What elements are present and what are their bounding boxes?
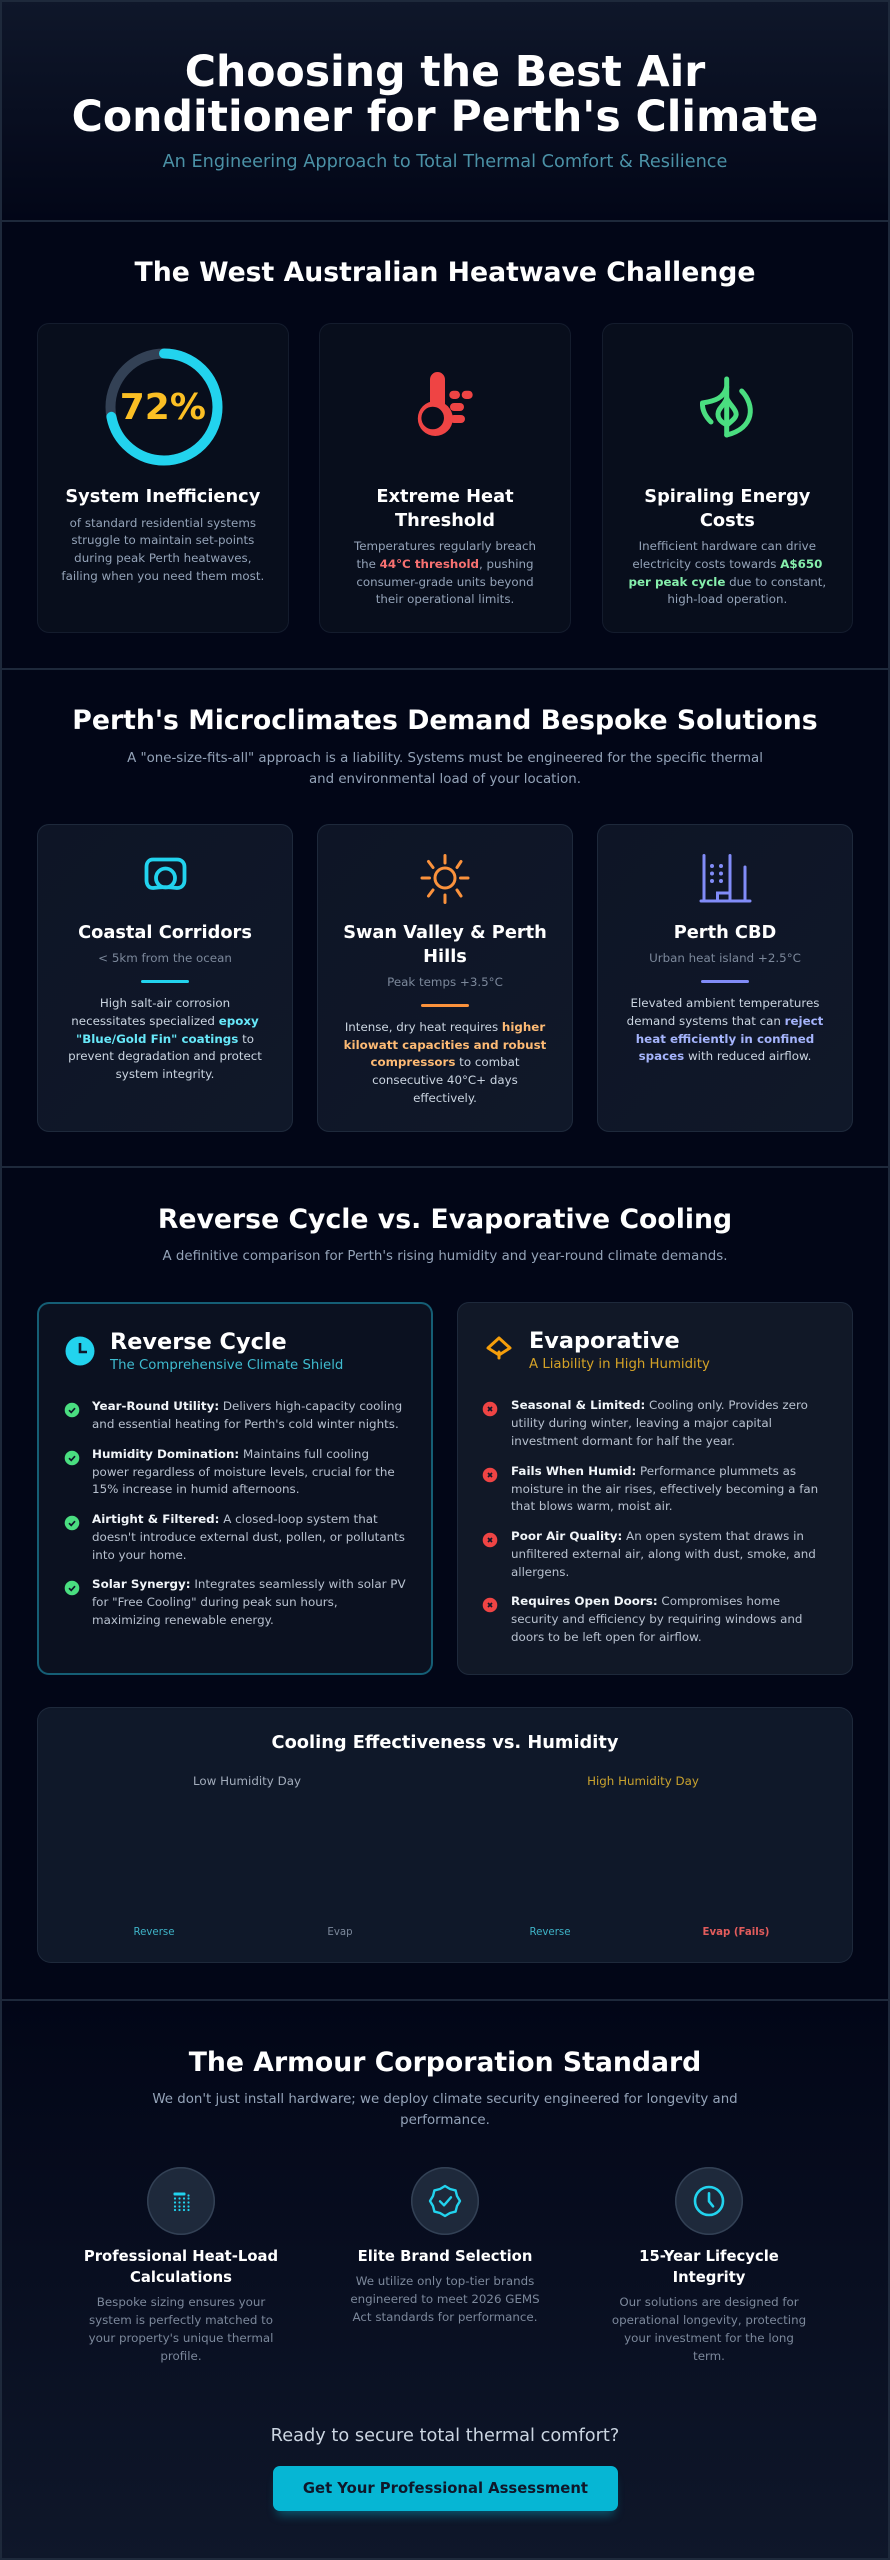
call to action button bbox=[273, 2466, 618, 2511]
list text bbox=[511, 1398, 808, 1448]
chart: 72 percent ring bbox=[106, 348, 222, 466]
panel: system inefficiency bbox=[37, 323, 289, 633]
column: heat-load calculations bbox=[65, 2167, 297, 2367]
icon: warning diamond bbox=[486, 1336, 512, 1360]
card title: Extreme Heat bbox=[376, 486, 514, 507]
intro text: A definitive comparison for Perth's rising humidity and year-round climate demands. bbox=[163, 1249, 727, 1264]
card text: Elevated ambient temperatures bbox=[631, 996, 819, 1010]
icon: check bbox=[64, 1450, 80, 1466]
column text: Act standards for performance. bbox=[353, 2310, 537, 2324]
list text: Poor Air Quality: An open system that draws in bbox=[511, 1529, 804, 1543]
icon: cross bbox=[482, 1532, 498, 1548]
list text: power regardless of moisture levels, crucial for the bbox=[92, 1465, 395, 1479]
stat: 72%: 72% bbox=[120, 387, 206, 428]
list text: Solar Synergy: Integrates seamlessly with solar PV bbox=[92, 1577, 406, 1591]
card text: effectively. bbox=[413, 1091, 477, 1105]
card text: per peak cycle due to constant, bbox=[629, 575, 826, 589]
icon: badge check bbox=[428, 2184, 462, 2218]
column title: Professional Heat-Load bbox=[84, 2248, 278, 2265]
intro text: We don't just install hardware; we deploy climate security engineered for longevity and bbox=[152, 2092, 738, 2107]
panel: spiraling energy costs bbox=[602, 323, 853, 633]
card text bbox=[354, 539, 536, 606]
card text: during peak Perth heatwaves, bbox=[74, 551, 252, 565]
column title: Elite Brand Selection bbox=[358, 2248, 532, 2265]
column title: 15-Year Lifecycle bbox=[639, 2248, 779, 2265]
column text: profile. bbox=[160, 2349, 202, 2363]
column text: Our solutions are designed for bbox=[619, 2295, 799, 2309]
column text: operational longevity, protecting bbox=[612, 2313, 806, 2327]
card text: system integrity. bbox=[116, 1067, 214, 1081]
card title: Coastal Corridors bbox=[78, 922, 252, 943]
location note: Peak temps +3.5°C bbox=[387, 974, 503, 988]
chart title: Cooling Effectiveness vs. Humidity bbox=[272, 1732, 618, 1753]
column text bbox=[65, 2294, 297, 2366]
column: elite brand selection bbox=[329, 2167, 561, 2367]
bar label: Evap bbox=[327, 1927, 353, 1938]
list text: for "Free Cooling" during peak sun hours, bbox=[92, 1595, 338, 1609]
list text: doesn't introduce external dust, pollen, or pollutants bbox=[92, 1530, 405, 1544]
card text: heat efficiently in confined bbox=[636, 1032, 814, 1046]
card text: Inefficient hardware can drive bbox=[639, 539, 816, 553]
list text bbox=[92, 1399, 402, 1431]
list text: Humidity Domination: Maintains full cooling bbox=[92, 1447, 369, 1461]
card text: kilowatt capacities and robust bbox=[344, 1038, 546, 1052]
intro text: A "one-size-fits-all" approach is a liability. Systems must be engineered for the specific thermal bbox=[127, 751, 763, 766]
card text: "Blue/Gold Fin" coatings to bbox=[76, 1032, 254, 1046]
column text: Bespoke sizing ensures your bbox=[97, 2295, 265, 2309]
column text bbox=[329, 2273, 561, 2327]
location note: Urban heat island +2.5°C bbox=[649, 951, 801, 965]
list item bbox=[64, 1447, 395, 1496]
column text: system is perfectly matched to bbox=[89, 2313, 273, 2327]
card text: consecutive 40°C+ days bbox=[372, 1073, 518, 1087]
panel: perth cbd bbox=[597, 824, 853, 1132]
group label: high humidity: High Humidity Day bbox=[587, 1774, 699, 1788]
list item bbox=[482, 1398, 808, 1448]
card text: consumer-grade units beyond bbox=[356, 575, 534, 589]
card text bbox=[627, 996, 823, 1063]
location note: < 5km from the ocean bbox=[98, 951, 232, 965]
icon: cross bbox=[482, 1468, 498, 1482]
heading: The Armour Corporation Standard bbox=[189, 2047, 701, 2078]
icon: check bbox=[64, 1580, 80, 1596]
column title bbox=[593, 2247, 825, 2288]
card title bbox=[376, 486, 514, 531]
list item bbox=[64, 1512, 405, 1562]
card title: Hills bbox=[423, 946, 467, 967]
list text: Year-Round Utility: Delivers high-capacity cooling bbox=[92, 1399, 402, 1413]
card title bbox=[644, 486, 810, 531]
list text: maximizing renewable energy. bbox=[92, 1613, 274, 1627]
list text: Requires Open Doors: Compromises home bbox=[511, 1594, 780, 1608]
card title: Threshold bbox=[395, 510, 495, 531]
card title: Swan Valley & Perth bbox=[343, 922, 547, 943]
column title bbox=[65, 2247, 297, 2288]
card text: High salt-air corrosion bbox=[100, 996, 230, 1010]
header bbox=[0, 0, 890, 222]
bar label: Reverse bbox=[134, 1927, 174, 1938]
card text: compressors to combat bbox=[370, 1055, 520, 1069]
list text: Seasonal & Limited: Cooling only. Provides zero bbox=[511, 1398, 808, 1412]
icon: cross bbox=[482, 1597, 498, 1613]
card text: demand systems that can reject bbox=[627, 1014, 823, 1028]
card text: high-load operation. bbox=[667, 592, 787, 606]
title: Choosing the Best Air bbox=[185, 46, 705, 96]
card title: Evaporative bbox=[529, 1328, 680, 1354]
column text: We utilize only top-tier brands bbox=[356, 2274, 534, 2288]
list item bbox=[482, 1529, 816, 1579]
icon: thermometer bbox=[418, 372, 473, 436]
list item bbox=[482, 1464, 818, 1513]
accent bar bbox=[421, 1004, 469, 1006]
icon: city building bbox=[700, 854, 752, 902]
subtitle: An Engineering Approach to Total Thermal Comfort & Resilience bbox=[163, 152, 727, 172]
card text bbox=[61, 516, 264, 583]
call to action button: Get Your Professional Assessment bbox=[303, 2480, 588, 2497]
panel: evaporative bbox=[457, 1302, 853, 1675]
column: lifecycle integrity bbox=[593, 2167, 825, 2367]
list text: investment dormant for half the year. bbox=[511, 1434, 735, 1448]
list text bbox=[511, 1593, 802, 1647]
intro text bbox=[127, 751, 763, 787]
intro text: performance. bbox=[400, 2113, 490, 2128]
column text: your property's unique thermal bbox=[89, 2331, 273, 2345]
section: heatwave challenge bbox=[0, 222, 890, 670]
call to action text: Ready to secure total thermal comfort? bbox=[271, 2426, 619, 2446]
column title: Calculations bbox=[130, 2269, 232, 2286]
card text: prevent degradation and protect bbox=[68, 1049, 262, 1063]
list item bbox=[482, 1593, 832, 1647]
panel: cooling effectiveness chart bbox=[37, 1707, 853, 1963]
icon: leaf energy bbox=[700, 376, 753, 438]
accent bar bbox=[701, 980, 749, 982]
bar label: Reverse bbox=[530, 1927, 570, 1938]
card text: Temperatures regularly breach bbox=[354, 539, 536, 553]
list text: doors to be left open for airflow. bbox=[511, 1630, 702, 1644]
column text: engineered to meet 2026 GEMS bbox=[350, 2292, 540, 2306]
section: reverse cycle vs evaporative bbox=[0, 1168, 890, 2001]
card title: System Inefficiency bbox=[65, 486, 260, 507]
list text bbox=[511, 1529, 816, 1579]
accent bar bbox=[141, 980, 189, 982]
card text bbox=[68, 996, 262, 1081]
icon: check bbox=[64, 1402, 80, 1418]
intro text: and environmental load of your location. bbox=[309, 772, 581, 787]
card text: failing when you need them most. bbox=[61, 569, 264, 583]
list item bbox=[64, 1577, 406, 1627]
card text: struggle to maintain set-points bbox=[71, 533, 254, 547]
list text: Airtight & Filtered: A closed-loop system that bbox=[92, 1512, 378, 1526]
card title bbox=[343, 922, 547, 967]
list text bbox=[92, 1447, 395, 1496]
section: microclimates bbox=[0, 670, 890, 1168]
list text: security and efficiency by requiring windows and bbox=[511, 1612, 802, 1626]
panel: coastal corridors bbox=[37, 824, 293, 1132]
card text: necessitates specialized epoxy bbox=[71, 1014, 259, 1028]
icon: clock bbox=[692, 2184, 726, 2218]
list text: allergens. bbox=[511, 1565, 569, 1579]
icon: cross bbox=[482, 1402, 498, 1416]
card title: Spiraling Energy bbox=[644, 486, 810, 507]
icon disc bbox=[411, 2167, 479, 2235]
list text: utility during winter, leaving a major capital bbox=[511, 1416, 772, 1430]
panel: extreme heat threshold bbox=[319, 323, 571, 633]
column text: term. bbox=[693, 2349, 725, 2363]
title: Conditioner for Perth's Climate bbox=[72, 92, 818, 142]
list text bbox=[92, 1512, 405, 1562]
list text: unfiltered external air, along with dust, smoke, and bbox=[511, 1547, 816, 1561]
card text bbox=[629, 539, 826, 606]
card text: Intense, dry heat requires higher bbox=[345, 1020, 545, 1034]
panel: reverse cycle bbox=[37, 1302, 433, 1675]
card text: the 44°C threshold, pushing bbox=[356, 557, 534, 571]
column text bbox=[593, 2294, 825, 2366]
card text: of standard residential systems bbox=[70, 516, 256, 530]
card title: Perth CBD bbox=[674, 922, 776, 943]
column title: Integrity bbox=[673, 2269, 745, 2286]
heading: The West Australian Heatwave Challenge bbox=[134, 257, 756, 288]
section: armour corporation standard bbox=[0, 2001, 890, 2560]
icon disc bbox=[675, 2167, 743, 2235]
card title: Reverse Cycle bbox=[110, 1328, 287, 1354]
list text: moisture in the air rises, effectively becoming a fan bbox=[511, 1482, 818, 1496]
card subtitle: A Liability in High Humidity bbox=[529, 1356, 710, 1372]
icon: check bbox=[64, 1516, 80, 1530]
card text: spaces with reduced airflow. bbox=[639, 1049, 811, 1063]
list text: and essential heating for Perth's cold winter nights. bbox=[92, 1417, 399, 1431]
card text: electricity costs towards A$650 bbox=[632, 557, 822, 571]
panel: swan valley bbox=[317, 824, 573, 1132]
list text: that blows warm, moist air. bbox=[511, 1499, 673, 1513]
intro text bbox=[0, 2090, 890, 2131]
list item bbox=[64, 1399, 402, 1431]
column text: your investment for the long bbox=[624, 2331, 794, 2345]
group label: low humidity: Low Humidity Day bbox=[193, 1774, 301, 1788]
list text bbox=[511, 1464, 818, 1513]
icon: clock bbox=[66, 1336, 94, 1366]
heading: Reverse Cycle vs. Evaporative Cooling bbox=[158, 1204, 732, 1235]
icon: coastal ring bbox=[144, 858, 186, 890]
icon disc bbox=[147, 2167, 215, 2235]
card subtitle: The Comprehensive Climate Shield bbox=[110, 1358, 343, 1372]
card title: Costs bbox=[700, 510, 755, 531]
list text bbox=[92, 1577, 406, 1627]
icon: sun bbox=[420, 854, 470, 904]
bar label: Evap (Fails) bbox=[703, 1927, 769, 1938]
list text: Fails When Humid: Performance plummets as bbox=[511, 1464, 796, 1478]
card text: their operational limits. bbox=[376, 592, 514, 606]
heading: Perth's Microclimates Demand Bespoke Solutions bbox=[72, 705, 818, 736]
icon: calculator bbox=[173, 2192, 191, 2212]
list text: into your home. bbox=[92, 1548, 187, 1562]
list text: 15% increase in humid afternoons. bbox=[92, 1482, 300, 1496]
card text bbox=[344, 1020, 546, 1105]
title bbox=[72, 46, 818, 142]
